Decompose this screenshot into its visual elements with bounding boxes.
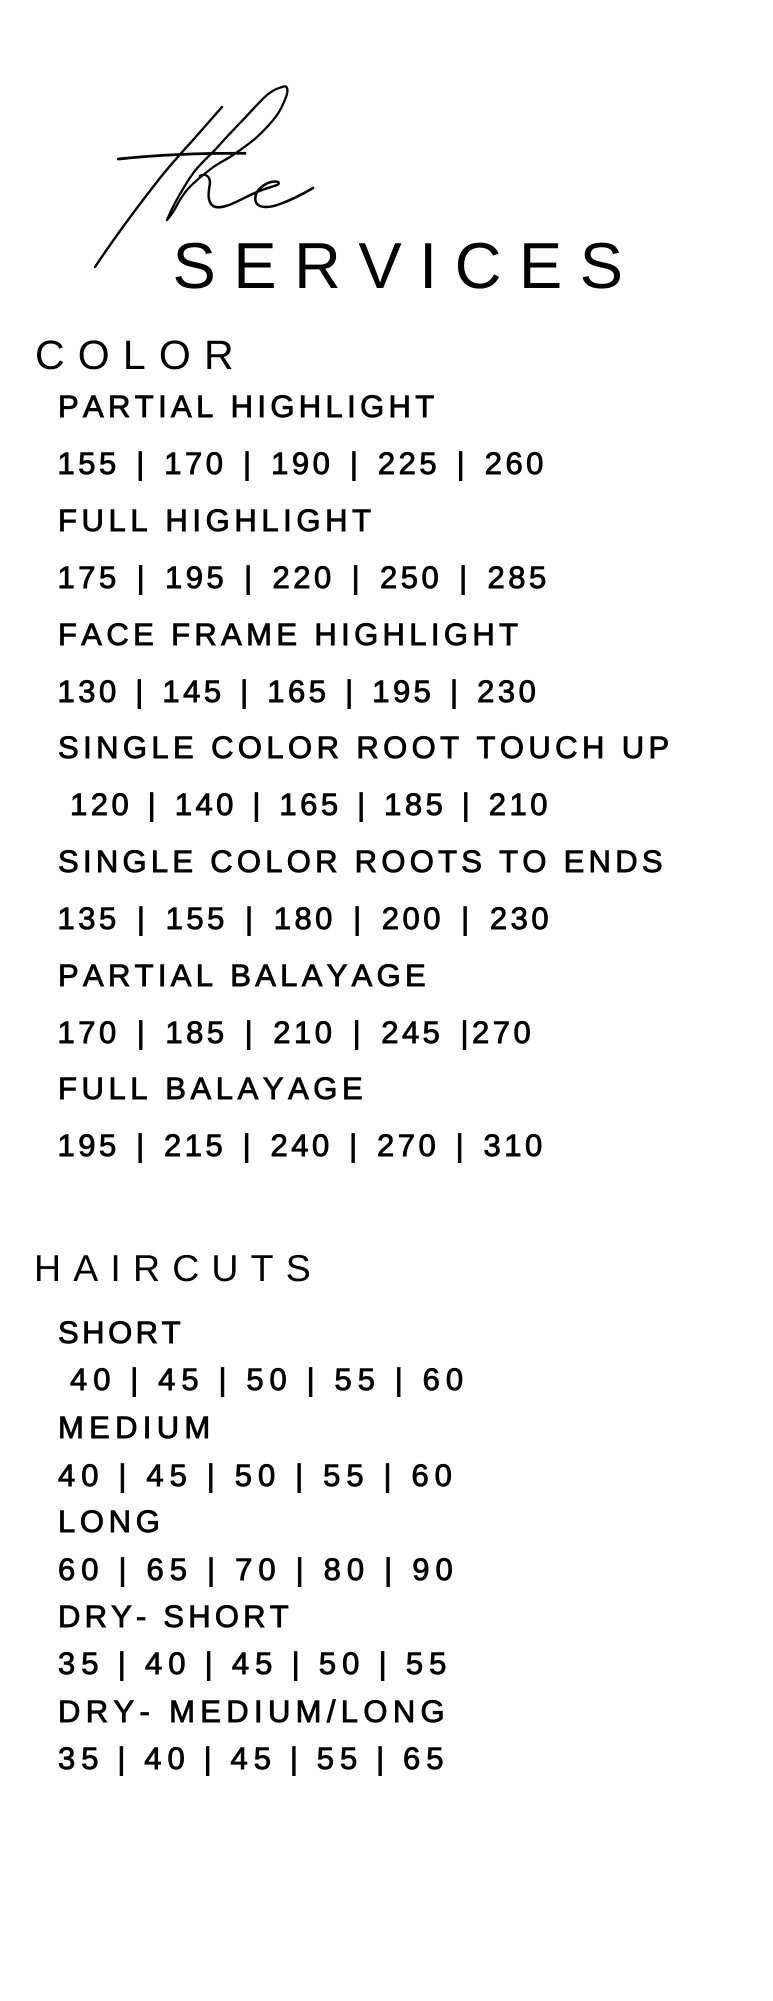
title (95, 86, 640, 302)
prices: short: 40 | 45 | 50 | 55 | 60 (70, 1362, 469, 1397)
prices: single color roots to ends: 135 | 155 | 180 | 200 | 230 (58, 901, 552, 936)
prices: dry short: 35 | 40 | 45 | 50 | 55 (58, 1646, 452, 1681)
prices: long: 60 | 65 | 70 | 80 | 90 (58, 1552, 459, 1587)
service: dry medium/long: DRY- MEDIUM/LONG (58, 1694, 450, 1729)
heading: COLOR: COLOR (35, 332, 247, 378)
prices: dry medium/long: 35 | 40 | 45 | 55 | 65 (58, 1741, 450, 1776)
prices: full highlight: 175 | 195 | 220 | 250 | 285 (58, 560, 550, 595)
service: dry short: DRY- SHORT (58, 1599, 293, 1634)
service: full balayage: FULL BALAYAGE (58, 1071, 367, 1106)
service: long: LONG (58, 1504, 164, 1539)
heading: HAIRCUTS: HAIRCUTS (34, 1247, 323, 1289)
prices: single color root touch up: 120 | 140 | 165 | 185 | 210 (70, 787, 551, 822)
service: face frame highlight: FACE FRAME HIGHLIGHT (58, 617, 522, 652)
section: color (35, 332, 674, 1163)
script word: the (95, 86, 313, 267)
service: single color roots to ends: SINGLE COLOR ROOTS TO ENDS (58, 844, 667, 879)
service: medium: MEDIUM (58, 1410, 216, 1445)
service: partial highlight: PARTIAL HIGHLIGHT (58, 389, 439, 424)
heading: SERVICES: SERVICES (172, 229, 640, 302)
service: partial balayage: PARTIAL BALAYAGE (58, 958, 430, 993)
prices: medium: 40 | 45 | 50 | 55 | 60 (58, 1458, 458, 1493)
section: haircuts (34, 1247, 469, 1776)
service: full highlight: FULL HIGHLIGHT (58, 503, 376, 538)
service: short: SHORT (58, 1315, 184, 1350)
service: single color root touch up: SINGLE COLOR ROOT TOUCH UP (58, 730, 674, 765)
prices: partial balayage: 170 | 185 | 210 | 245 |270 (58, 1015, 534, 1050)
prices: face frame highlight: 130 | 145 | 165 | 195 | 230 (58, 674, 539, 709)
prices: partial highlight: 155 | 170 | 190 | 225 | 260 (58, 446, 547, 481)
prices: full balayage: 195 | 215 | 240 | 270 | 310 (58, 1128, 546, 1163)
